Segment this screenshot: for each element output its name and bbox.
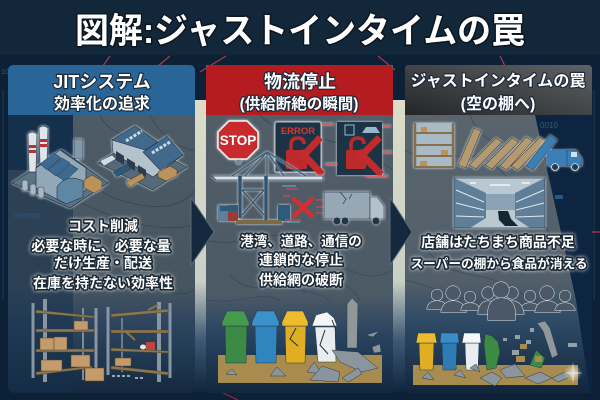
title bar — [0, 0, 600, 55]
title: 図解:ジャストインタイムの罠 — [75, 12, 525, 51]
icon: error monitor with broken lock: ERROR — [281, 126, 315, 137]
arrow: stoppage to trap — [390, 198, 412, 265]
panel header: trap: ジャストインタイムの罠 — [411, 72, 585, 90]
icon: warehouse — [98, 126, 187, 190]
icon: red cross over damaged link — [282, 186, 329, 222]
icon: port crane and containers — [212, 152, 323, 224]
icon: delivery truck — [526, 135, 582, 170]
panel header: trap: (空の棚へ) — [461, 94, 535, 113]
panel header: trap — [405, 65, 592, 115]
panel: JIT system: 1000001 — [14, 213, 41, 220]
panel header: JIT — [8, 65, 195, 115]
panel header: JIT: 効率化の追求 — [54, 94, 150, 113]
text block: stoppage: 連鎖的な停止 — [259, 252, 343, 268]
arrow: JIT to stoppage — [191, 198, 214, 265]
icon: crowd of people — [427, 282, 575, 320]
icon: stocked shelf — [33, 299, 104, 382]
divider: map strip 1 — [195, 100, 206, 392]
panel header: JIT: JITシステム — [53, 72, 151, 92]
icon: damaged recycling bins — [218, 298, 382, 383]
icon: falling shelf boards — [458, 128, 546, 170]
panel header: logistics: (供給断絶の瞬間) — [240, 94, 358, 113]
divider: map strip 2 — [393, 100, 405, 392]
panel: JIT trap — [405, 65, 592, 393]
panel header: logistics: 物流停止 — [264, 72, 336, 92]
text block: stoppage: 港湾、道路、通信の — [240, 233, 362, 249]
text block: shortage: 店舗はたちまち商品不足 — [421, 234, 575, 250]
icon: stop sign — [218, 121, 258, 164]
icon: stop sign: STOP — [220, 133, 256, 148]
text block: stoppage: 供給網の破断 — [259, 272, 343, 288]
icon: depleted shelf — [108, 302, 170, 382]
text block: JIT benefits: だけ生産・配送 — [54, 255, 152, 271]
icon: sparkle — [563, 362, 583, 384]
text block: shortage: スーパーの棚から食品が消える — [410, 256, 588, 271]
text block: JIT benefits: コスト削減 — [68, 218, 138, 234]
text block: JIT benefits — [31, 218, 173, 291]
icon: empty shelf — [414, 123, 454, 168]
text block: JIT benefits: 在庫を持たない効率性 — [33, 275, 173, 291]
text block: shortage — [410, 234, 588, 271]
text block: JIT benefits: 必要な時に、必要な量 — [31, 238, 171, 254]
text block: stoppage — [240, 233, 362, 288]
icon: cracked truck — [324, 192, 384, 224]
panel: JIT system — [8, 65, 195, 393]
icon: collapsing bins and rubble — [413, 321, 578, 386]
panel: logistics stoppage — [206, 65, 393, 393]
panel header: logistics — [206, 65, 393, 115]
icon: empty store aisle — [454, 178, 545, 228]
icon: factory — [12, 126, 108, 208]
panel: JIT trap: 0010 — [540, 121, 558, 130]
background: 10 — [1, 69, 9, 76]
icon: error monitor with broken lock — [275, 122, 321, 172]
icon: failed network panel with broken lock — [322, 122, 392, 176]
